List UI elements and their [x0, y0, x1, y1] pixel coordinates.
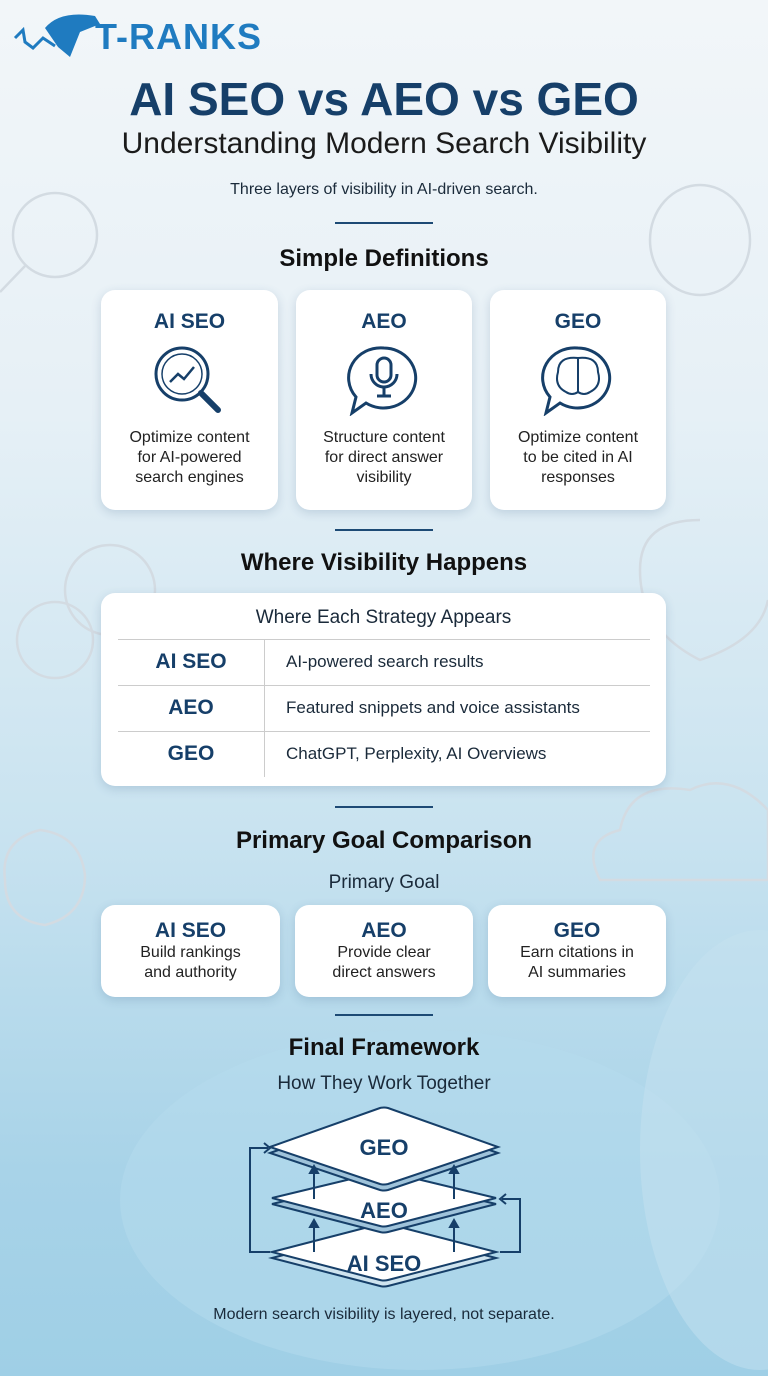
- row: GEO: GEO: [168, 742, 214, 765]
- goal card: AI SEO: AI SEO: [155, 919, 226, 942]
- goal card: GEO: GEO: [554, 919, 600, 942]
- layer: GEO: [270, 1108, 498, 1190]
- subheading: primary goal: Primary Goal: [329, 872, 439, 893]
- icon: brain bubble: [541, 346, 612, 416]
- card: GEO: [490, 290, 666, 510]
- table card: Where Each Strategy Appears: [256, 607, 511, 628]
- logo: [14, 14, 262, 57]
- layer: AEO: AEO: [360, 1198, 408, 1223]
- layer: AEO: [272, 1172, 496, 1232]
- layer: GEO: GEO: [360, 1135, 408, 1160]
- icon: mic bubble: [347, 346, 418, 416]
- footer note: Modern search visibility is layered, not separate.: [213, 1306, 555, 1323]
- card: AEO: [296, 290, 472, 510]
- row: AI SEO: AI SEO: [155, 650, 227, 673]
- layered diagram: [249, 1106, 521, 1288]
- title: AI SEO vs AEO vs GEO: [129, 73, 639, 125]
- row: AEO: AEO: [168, 696, 214, 719]
- card: AEO: AEO: [361, 310, 407, 333]
- goal card: AEO: AEO: [361, 919, 407, 942]
- logo: T-RANKS: [95, 16, 262, 57]
- row: GEO: [168, 742, 546, 765]
- heading: simple definitions: Simple Definitions: [279, 245, 489, 272]
- card: AI SEO: search engines: [135, 469, 244, 486]
- goal card: AEO: [295, 905, 473, 997]
- goal card: GEO: Earn citations in: [520, 944, 634, 961]
- heading: final framework: Final Framework: [289, 1034, 479, 1061]
- card: AI SEO: Optimize content: [129, 429, 250, 446]
- row: AEO: [168, 696, 580, 719]
- row: GEO: ChatGPT, Perplexity, AI Overviews: [286, 744, 546, 763]
- goal card: AEO: Provide clear: [337, 944, 431, 961]
- row: AI SEO: [155, 650, 483, 673]
- goal card: AEO: direct answers: [332, 964, 436, 981]
- card: GEO: GEO: [555, 310, 601, 333]
- heading: primary goal comparison: Primary Goal Comparison: [236, 827, 532, 854]
- row: AEO: Featured snippets and voice assistants: [286, 698, 580, 717]
- layer: AI SEO: AI SEO: [347, 1251, 421, 1276]
- layer: AI SEO: [272, 1224, 496, 1286]
- goal card: GEO: AI summaries: [528, 964, 626, 981]
- row: AI SEO: AI-powered search results: [286, 652, 483, 671]
- goal card: GEO: [488, 905, 666, 997]
- card: GEO: Optimize content: [518, 429, 638, 446]
- card: GEO: responses: [541, 469, 615, 486]
- table card: [101, 593, 666, 786]
- goal card: AI SEO: Build rankings: [140, 944, 241, 961]
- tagline: Three layers of visibility in AI-driven search.: [230, 181, 538, 198]
- goal card: AI SEO: [101, 905, 280, 997]
- card: AEO: Structure content: [323, 429, 445, 446]
- card: AI SEO: for AI-powered: [137, 449, 242, 466]
- card: GEO: to be cited in AI: [523, 449, 633, 466]
- icon: magnifier chart: [154, 346, 221, 413]
- card: AI SEO: [101, 290, 278, 510]
- card: AEO: visibility: [356, 469, 412, 486]
- card: AI SEO: AI SEO: [154, 310, 225, 333]
- subtitle: Understanding Modern Search Visibility: [122, 127, 646, 160]
- heading: where visibility happens: Where Visibility Happens: [241, 549, 527, 576]
- subheading: How They Work Together: [277, 1073, 491, 1094]
- goal card: AI SEO: and authority: [144, 964, 237, 981]
- card: AEO: for direct answer: [325, 449, 443, 466]
